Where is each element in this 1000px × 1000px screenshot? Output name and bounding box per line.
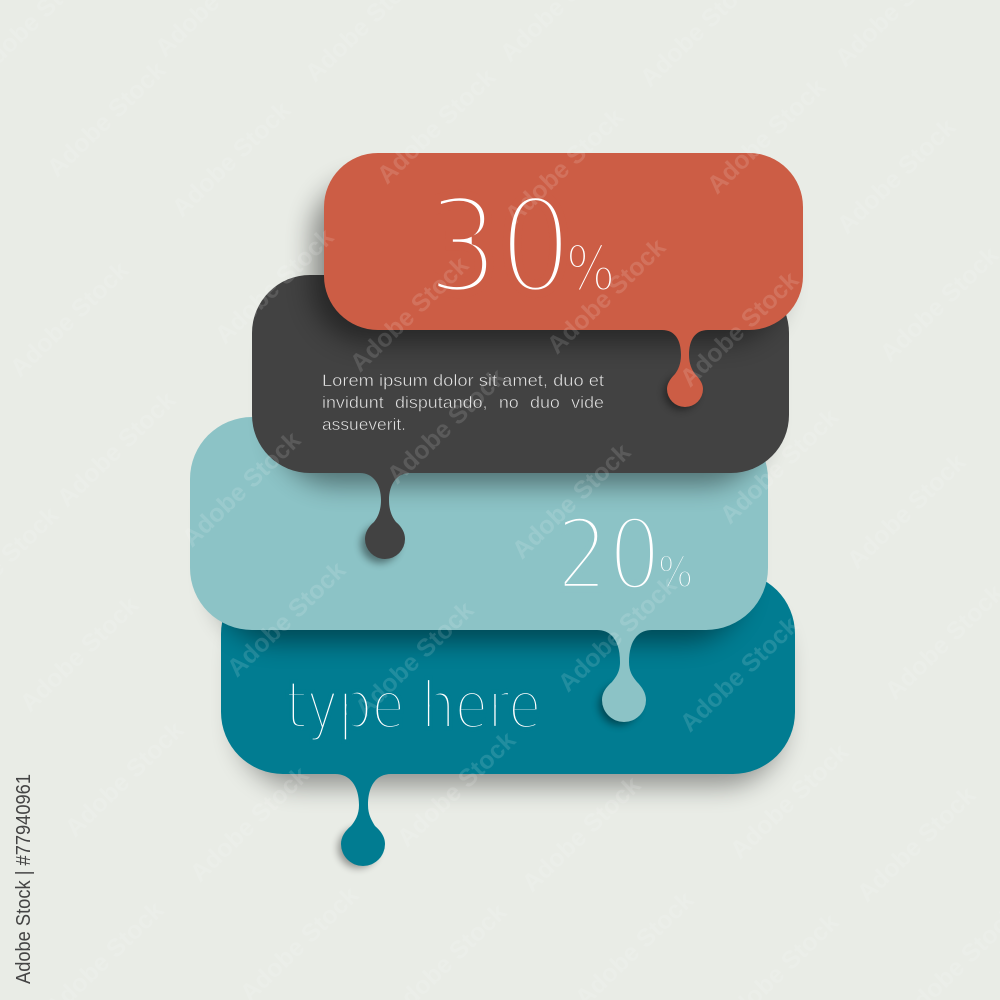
text block: lorem ipsum: assueverit. xyxy=(322,415,406,434)
watermark pattern: Adobe Stock xyxy=(675,611,804,737)
bubble body: charcoal xyxy=(252,275,789,559)
text: 20: 20 xyxy=(556,498,661,613)
panel: text bubble xyxy=(252,275,789,563)
watermark pattern: Adobe Stock xyxy=(5,256,134,382)
watermark pattern: Adobe Stock xyxy=(725,738,854,864)
watermark pattern: Adobe Stock xyxy=(553,571,682,697)
watermark pattern: Adobe Stock xyxy=(382,363,511,489)
panel: 20 percent bubble xyxy=(190,417,768,725)
text block: lorem ipsum: Lorem ipsum dolor sit amet, duo et xyxy=(322,371,604,390)
watermark pattern: Adobe Stock xyxy=(517,771,646,897)
text block: lorem ipsum: invidunt disputando, no duo vide xyxy=(322,393,604,412)
text: percent sign 30: % xyxy=(566,232,615,305)
text block: lorem ipsum xyxy=(322,371,604,434)
bubble body: light teal xyxy=(190,417,768,722)
text: percent sign 20: % xyxy=(658,548,693,598)
text: type here: type here xyxy=(286,667,541,744)
watermark pattern: Adobe Stock xyxy=(15,591,144,717)
watermark pattern: Adobe Stock xyxy=(222,556,351,682)
bubble body: red xyxy=(324,153,803,407)
shadow: 20 percent bubble xyxy=(215,450,745,725)
shadow: type here bubble xyxy=(238,600,783,868)
text: 30: 30 xyxy=(426,170,572,324)
text: stock id: Adobe Stock | #77940961 xyxy=(13,774,35,984)
watermark pattern: Adobe Stock xyxy=(542,233,671,359)
bubble body: dark teal xyxy=(221,572,795,866)
watermark pattern: Adobe Stock xyxy=(702,73,831,199)
watermark pattern: Adobe Stock xyxy=(675,266,804,392)
shadow: text bubble xyxy=(275,300,765,563)
watermark pattern: Adobe Stock xyxy=(842,448,971,574)
watermark pattern: Adobe Stock xyxy=(345,251,474,377)
shadow: 30 percent bubble xyxy=(312,180,782,410)
watermark pattern: Adobe Stock xyxy=(167,96,296,222)
watermark pattern: Adobe Stock xyxy=(715,403,844,529)
watermark pattern: Adobe Stock xyxy=(372,63,501,189)
watermark pattern: Adobe Stock xyxy=(392,726,521,852)
watermark pattern: Adobe Stock xyxy=(177,426,306,552)
panel: 30 percent bubble xyxy=(312,153,803,410)
watermark pattern: Adobe Stock xyxy=(60,716,189,842)
watermark pattern: Adobe Stock xyxy=(852,781,981,907)
watermark pattern: Adobe Stock xyxy=(42,56,171,182)
watermark pattern: Adobe Stock xyxy=(185,761,314,887)
watermark pattern: Adobe Stock xyxy=(500,103,629,229)
watermark pattern: Adobe Stock xyxy=(350,596,479,722)
watermark pattern: Adobe Stock xyxy=(52,386,181,512)
panel: type here bubble xyxy=(221,572,795,868)
watermark pattern: Adobe Stock xyxy=(210,223,339,349)
watermark pattern: Adobe Stock xyxy=(832,113,961,239)
watermark pattern: Adobe Stock xyxy=(507,438,636,564)
